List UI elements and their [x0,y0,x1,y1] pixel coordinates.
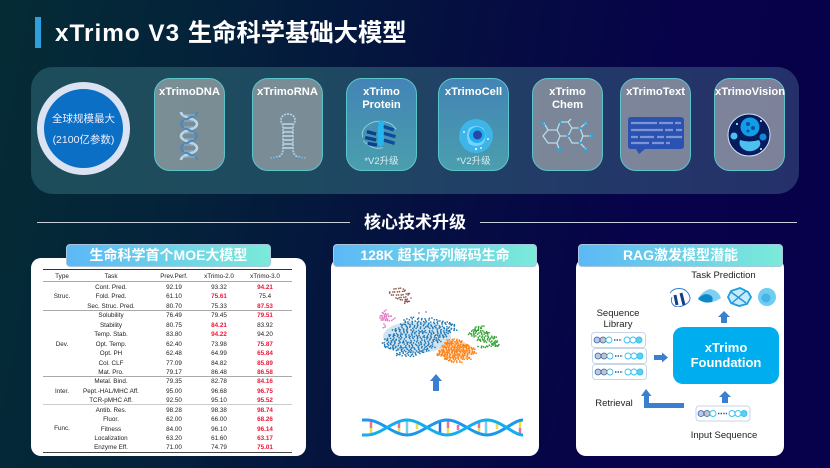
arrow: input to foundation [719,391,731,403]
table: benchmark results: 94.22 [211,331,227,338]
table: benchmark results: 62.40 [166,341,182,348]
table: benchmark results: 96.75 [257,388,273,395]
label: input sequence: Input Sequence [691,430,757,441]
table: benchmark results: 76.49 [166,312,182,319]
table: benchmark results: 63.17 [257,435,273,442]
table: benchmark results: Enzyme Eff. [94,444,128,451]
banner: 128K [333,244,537,267]
table: benchmark results: 68.26 [257,416,273,423]
table: benchmark results: Fluor. [103,416,119,423]
table: benchmark results [43,269,292,453]
table: benchmark results: Stability [100,322,122,329]
table: benchmark results: Col. CLF [99,360,123,367]
panel: 128K [331,258,539,456]
table: benchmark results: 75.33 [211,303,227,310]
card: xTrimoRNA: xTrimoRNA [257,86,318,98]
table: benchmark results: 75.01 [257,444,273,451]
table: benchmark results: 95.10 [211,397,227,404]
badge: largest scale: 全球规模最大 [52,113,115,125]
badge: largest scale: (2100亿参数) [53,134,114,146]
table: benchmark results: 79.17 [166,369,182,376]
label: sequence library: Library [603,319,633,330]
table: benchmark results: 75.87 [257,341,273,348]
arrow: library to foundation [654,352,668,362]
table: benchmark results: 64.99 [211,350,227,357]
panel: MOE table [31,258,306,456]
table: benchmark results: Func. [54,425,70,432]
table: benchmark results: Antib. Res. [96,407,126,414]
table: benchmark results: Type [55,273,69,280]
badge: largest scale [37,82,130,175]
card: xTrimoDNA [154,78,225,171]
icon: protein ribbon [362,120,396,149]
box: xTrimo Foundation [673,327,779,384]
label: retrieval: Retrieval [595,398,633,409]
table: benchmark results: Opt. Temp. [96,341,126,348]
banner: MOE [66,244,271,267]
table: benchmark results: Struc. [54,293,70,300]
table: benchmark results: 98.38 [211,407,227,414]
label: sequence library: Sequence [597,308,639,319]
table: benchmark results: 94.21 [257,284,273,291]
table: benchmark results: Fitness [101,426,121,433]
note: V2 upgrade: *V2升级 [456,156,491,167]
table: benchmark results: Metal. Bind. [94,378,128,385]
table: benchmark results: 61.10 [166,293,182,300]
table: benchmark results: 95.00 [166,388,182,395]
card: xTrimo Protein [346,78,417,171]
table: benchmark results: 84.21 [211,322,227,329]
icon: text bubble [628,117,684,154]
table: benchmark results: 95.52 [257,397,273,404]
table: benchmark results: Cont. Pred. [95,284,127,291]
title accent bar [35,17,41,48]
card: xTrimoCell [438,78,509,171]
icon: cell [459,119,493,153]
table: benchmark results: 61.60 [211,435,227,442]
card: xTrimo Chem [532,78,603,171]
table: benchmark results: Dev. [56,341,68,348]
table: benchmark results: 83.80 [166,331,182,338]
arrow: to task prediction [718,311,730,323]
input sequence row [696,406,750,422]
table: benchmark results: 62.48 [166,350,182,357]
table: benchmark results: 66.00 [211,416,227,423]
card: xTrimoVision: xTrimoVision [715,86,785,98]
table: benchmark results: 96.10 [211,426,227,433]
table: benchmark results: 79.51 [257,312,273,319]
table: benchmark results: Inter. [55,388,69,395]
table: benchmark results: xTrimo-2.0 [204,273,234,280]
card: xTrimoCell: xTrimoCell [445,86,502,98]
table: benchmark results: 96.14 [257,426,273,433]
card: xTrimoText: xTrimoText [626,86,685,98]
table: benchmark results: 79.45 [211,312,227,319]
banner: 128K: 128K 超长序列解码生命 [360,247,510,263]
table: benchmark results: 84.82 [211,360,227,367]
table: benchmark results: Sec. Struc. Pred. [87,303,135,310]
note: V2 upgrade: *V2升级 [364,156,399,167]
icons: prediction outputs [670,287,776,307]
card: xTrimoRNA [252,78,323,171]
table: benchmark results: 65.84 [257,350,273,357]
card: xTrimo Chem: Chem [552,99,583,111]
icon: DNA helix [180,112,198,160]
table: benchmark results: 82.78 [211,378,227,385]
table: benchmark results: Solubility [98,312,124,319]
table: benchmark results: 71.00 [166,444,182,451]
card: xTrimoDNA: xTrimoDNA [159,86,220,98]
table: benchmark results: 83.92 [257,322,273,329]
table: benchmark results: 63.20 [166,435,182,442]
table: benchmark results: 94.20 [257,331,273,338]
box: xTrimo Foundation: xTrimo [705,340,747,355]
table: benchmark results: 75.61 [211,293,227,300]
banner: MOE: 生命科学首个MOE大模型 [90,247,247,263]
table: benchmark results: Task [105,273,117,280]
table: benchmark results: Temp. Stab. [94,331,128,338]
table: benchmark results: 87.53 [257,303,273,310]
card: xTrimo Protein: Protein [362,99,401,111]
panel: model family [31,67,799,194]
table: benchmark results: Localization [94,435,128,442]
table: benchmark results: 80.75 [166,322,182,329]
table: benchmark results: 79.35 [166,378,182,385]
icon: microscopy circle [728,114,770,156]
table: benchmark results: 62.00 [166,416,182,423]
table: benchmark results: 86.48 [211,369,227,376]
table: benchmark results: 77.09 [166,360,182,367]
label: task prediction: Task Prediction [691,270,756,281]
arrow: up to scatter [430,374,442,391]
card: xTrimoText [620,78,691,171]
table: benchmark results: 74.79 [211,444,227,451]
panel: RAG [576,258,784,456]
table: benchmark results: 96.68 [211,388,227,395]
title: xTrimo V3 生命科学基础大模型 [55,20,407,47]
icon: RNA hairpin [270,113,306,159]
table: benchmark results: 93.32 [211,284,227,291]
card: xTrimo Protein: xTrimo [363,86,400,98]
table: benchmark results: 92.19 [166,284,182,291]
banner: RAG: RAG激发模型潜能 [623,247,738,263]
table: benchmark results: Mat. Pro. [98,369,124,376]
table: benchmark results: xTrimo-3.0 [250,273,280,280]
table: benchmark results: Fold. Pred. [96,293,126,300]
table: benchmark results: 73.98 [211,341,227,348]
card: xTrimoVision [714,78,785,171]
divider left [37,222,350,223]
table: benchmark results: 98.28 [166,407,182,414]
table: benchmark results: 98.74 [257,407,273,414]
table: benchmark results: 92.50 [166,397,182,404]
illustration: DNA strand [362,418,523,436]
banner: RAG [578,244,783,267]
chart: embedding scatter [379,287,500,364]
table: benchmark results: TCR-pMHC Aff. [89,397,133,404]
sequence library rows [591,332,647,380]
table: benchmark results: 75.4 [259,293,271,300]
card: xTrimo Chem: xTrimo [549,86,586,98]
divider right [480,222,797,223]
table: benchmark results: 84.16 [257,378,273,385]
table: benchmark results: 84.00 [166,426,182,433]
table: benchmark results: 80.70 [166,303,182,310]
box: xTrimo Foundation: Foundation [691,354,761,370]
section heading: 核心技术升级 [364,213,466,232]
label: sequence library [597,308,639,330]
table: benchmark results: 85.89 [257,360,273,367]
icon: chemical structure [542,118,594,152]
arrow: retrieval [641,389,684,408]
table: benchmark results: 86.58 [257,369,273,376]
table: benchmark results: Pept.-HAL/MHC Aff. [83,388,139,395]
table: benchmark results: Prev.Perf. [160,273,188,280]
table: benchmark results: Opt. PH [100,350,122,357]
